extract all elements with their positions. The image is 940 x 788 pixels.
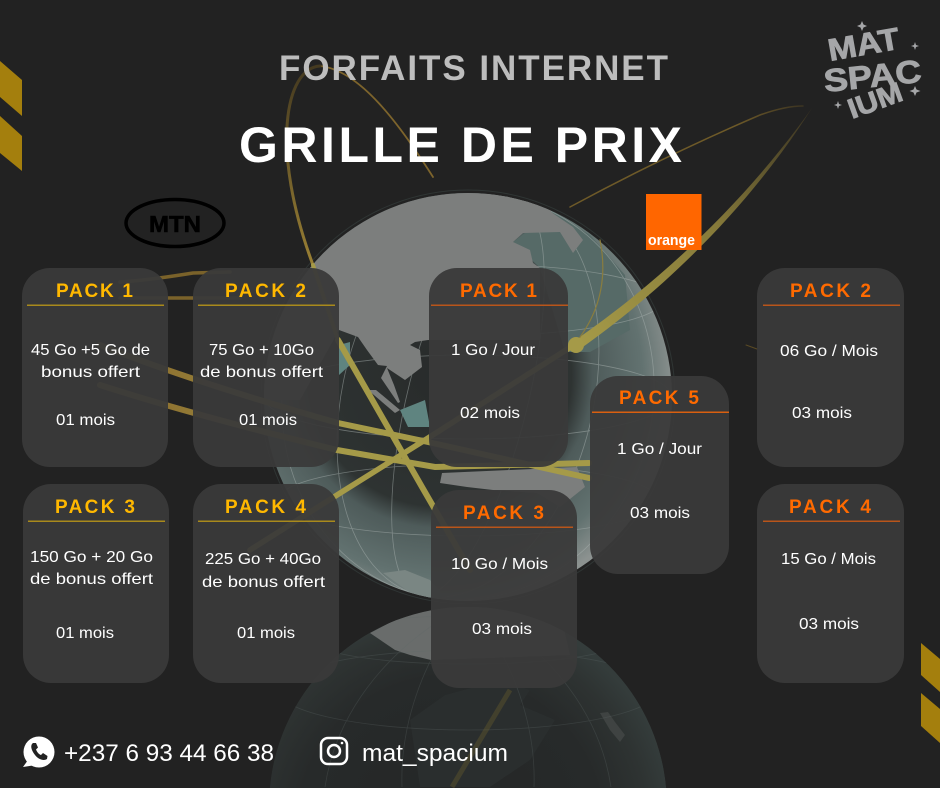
logo: MTN: MTN [149,211,201,237]
panel: MTN pack 4: de bonus offert [202,574,326,591]
panel: MTN pack 3: PACK 3 [55,497,135,518]
reflected globe [270,604,666,788]
panel: MTN pack 1: PACK 1 [56,281,133,302]
panel: Orange pack 1: 02 mois [460,405,520,422]
panel: Orange pack 4: 15 Go / Mois [781,551,876,568]
logo: MTN [126,200,224,246]
panel: Orange pack 1 [429,268,568,467]
logo: mat spacium: MAT [825,21,902,68]
panel: MTN pack 2: 75 Go + 10Go [209,342,314,359]
panel: MTN pack 2 [193,268,339,467]
panel: Orange pack 5: PACK 5 [619,388,699,409]
panel: MTN pack 1: 01 mois [56,412,115,429]
decorative chevrons: bottom right [921,643,940,743]
panel: Orange pack 2 [757,268,904,467]
panel: MTN pack 1: 45 Go +5 Go de [31,342,150,359]
panel: MTN pack 4: 225 Go + 40Go [205,551,321,568]
panel: MTN pack 2: PACK 2 [225,281,306,302]
icon: whatsapp [23,736,54,768]
panel: MTN pack 4: PACK 4 [225,497,306,518]
panel: Orange pack 3: PACK 3 [463,503,544,524]
panel: Orange pack 1: 1 Go / Jour [451,342,536,359]
panel: MTN pack 3: de bonus offert [30,571,154,588]
title: forfaits internet: FORFAITS INTERNET [279,49,668,88]
logo: mat spacium [822,21,923,125]
icon: instagram [321,738,347,764]
panel: Orange pack 5: 1 Go / Jour [617,441,703,458]
panel: MTN pack 3: 01 mois [56,625,114,642]
logo: orange [646,194,702,250]
panel: Orange pack 2: 06 Go / Mois [780,343,878,360]
panel: MTN pack 2: 01 mois [239,412,297,429]
panel: Orange pack 2: PACK 2 [790,281,871,302]
panel: Orange pack 5: 03 mois [630,505,690,522]
panel: Orange pack 3: 10 Go / Mois [451,556,548,573]
panel: Orange pack 3: 03 mois [472,621,532,638]
panel: MTN pack 2: de bonus offert [200,364,324,381]
panel: Orange pack 4 [757,484,904,683]
globe [273,190,674,601]
panel: Orange pack 4: 03 mois [799,616,859,633]
panel: MTN pack 3 [23,484,169,683]
panel: MTN pack 4: 01 mois [237,625,295,642]
title: grille de prix: GRILLE DE PRIX [239,117,682,173]
panel: Orange pack 1: PACK 1 [460,281,537,302]
panel: MTN pack 1 [22,268,168,467]
decorative chevrons: top left [0,61,22,171]
panel: Orange pack 2: 03 mois [792,405,852,422]
logo: mat spacium: IUM [843,76,907,125]
instagram handle: mat_spacium [362,740,508,767]
phone number: +237 6 93 44 66 38 [64,740,274,767]
panel: Orange pack 3 [431,490,577,688]
panel: MTN pack 4 [193,484,339,683]
panel: Orange pack 5 [590,376,729,574]
panel: MTN pack 1: bonus offert [41,364,141,381]
logo: orange: orange [648,232,695,249]
orbit lines [100,66,812,570]
panel: Orange pack 4: PACK 4 [789,497,871,518]
panel: MTN pack 3: 150 Go + 20 Go [30,549,153,566]
logo: mat spacium: SPAC [822,53,923,99]
